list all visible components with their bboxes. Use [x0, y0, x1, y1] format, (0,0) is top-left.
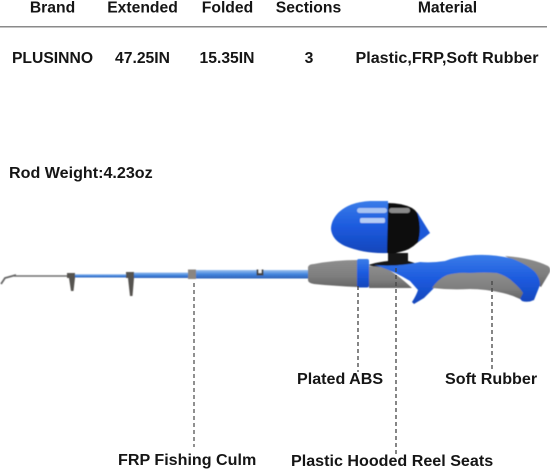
dashed leader: Plated ABS [357, 286, 359, 372]
rod guides and ferrule [67, 270, 264, 296]
table value: sections: 3 [305, 50, 314, 67]
table value: folded length: 15.35IN [200, 50, 254, 67]
reel cover: blue [331, 201, 388, 253]
foregrip [308, 260, 358, 287]
reel foot [368, 253, 418, 267]
table header: Extended: Extended [107, 0, 178, 16]
label: Soft Rubber: Soft Rubber [445, 370, 538, 388]
table value: extended length: 47.25IN [115, 50, 170, 67]
rod weight label: Rod Weight:4.23oz [9, 164, 153, 182]
table header: Brand: Brand [30, 0, 75, 16]
grey rubber grip [432, 272, 523, 299]
dashed leader: FRP Fishing Culm [193, 283, 195, 447]
rear grey section of seat [369, 266, 412, 288]
table header: Sections: Sections [276, 0, 341, 16]
fishing rod illustration [1, 201, 550, 304]
blue handle body and trigger [374, 255, 540, 304]
dashed leader: Plastic Hooded Reel Seats [395, 268, 397, 454]
rod shaft sections [72, 270, 310, 278]
table header divider [0, 26, 547, 28]
label: Plated ABS: Plated ABS [297, 370, 383, 388]
label: FRP Fishing Culm: FRP Fishing Culm [118, 451, 256, 469]
reel front: black [387, 203, 426, 253]
blue collar [357, 259, 369, 288]
table header: Folded: Folded [202, 0, 253, 16]
table value: brand: PLUSINNO [12, 50, 93, 67]
rod tip and thin line [1, 275, 68, 284]
reel highlights [357, 208, 410, 223]
grey handle end cap [505, 256, 550, 287]
reel blue nose accent [417, 212, 430, 242]
dashed leader: Soft Rubber [491, 281, 493, 372]
table header: Material: Material [418, 0, 477, 16]
table value: material: Plastic,FRP,Soft Rubber [355, 49, 539, 67]
